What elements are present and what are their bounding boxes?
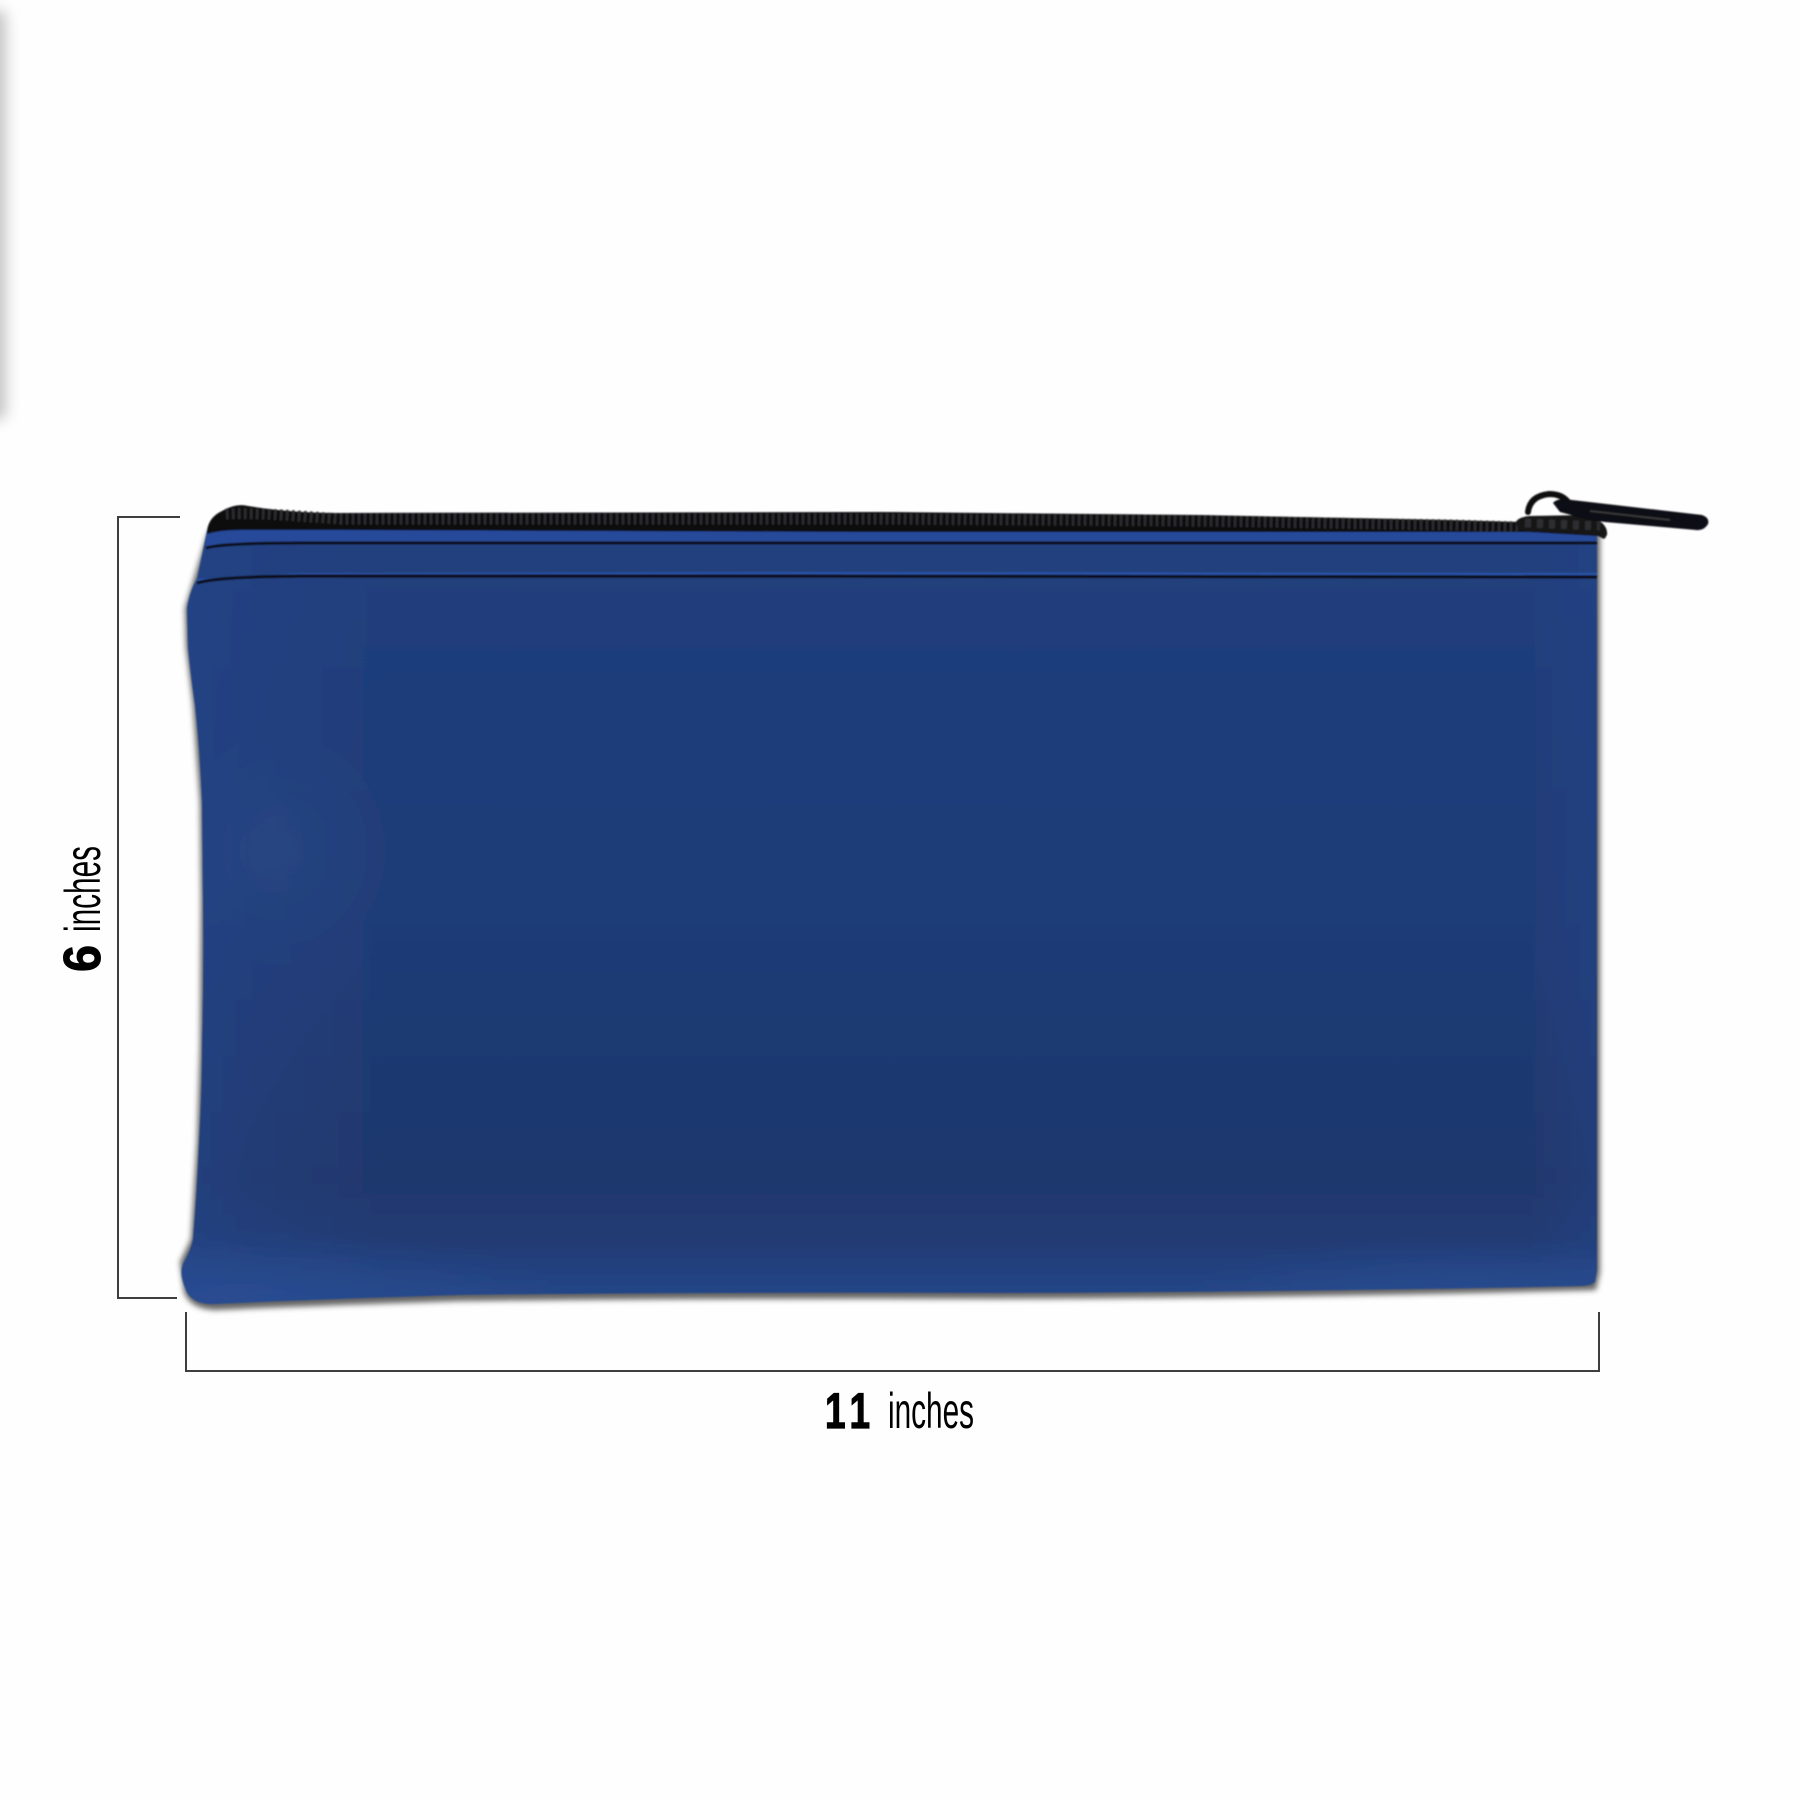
- bag sheen: [182, 530, 1596, 1296]
- lower band highlight: [197, 572, 1597, 582]
- width dimension bracket: [186, 1312, 1599, 1371]
- value: 6: 6: [54, 945, 112, 972]
- unit: inches: inches: [55, 846, 111, 932]
- height dimension bracket: [118, 517, 180, 1298]
- zipper slider: [1516, 515, 1607, 539]
- height label: [54, 846, 112, 972]
- pull highlight: [1590, 511, 1670, 520]
- infographic: bag with dimensions: [0, 4, 1710, 1429]
- zipper teeth: [226, 514, 1518, 527]
- zipper tape: [207, 505, 1606, 538]
- unit: inches: inches: [888, 1383, 974, 1439]
- zipper pull: [1553, 499, 1708, 530]
- zipper ring: [1528, 494, 1568, 512]
- bag shadow: [180, 532, 1600, 1310]
- lower stitch: [197, 576, 1597, 583]
- upper stitch: [206, 543, 1597, 548]
- value: 11: 11: [825, 1384, 876, 1439]
- top binding band: [206, 530, 1597, 546]
- edge shadow at top left: [0, 10, 6, 420]
- bag body: [181, 526, 1597, 1304]
- width label: [825, 1383, 974, 1439]
- bag: [180, 490, 1710, 1305]
- slider teeth: [1525, 523, 1600, 526]
